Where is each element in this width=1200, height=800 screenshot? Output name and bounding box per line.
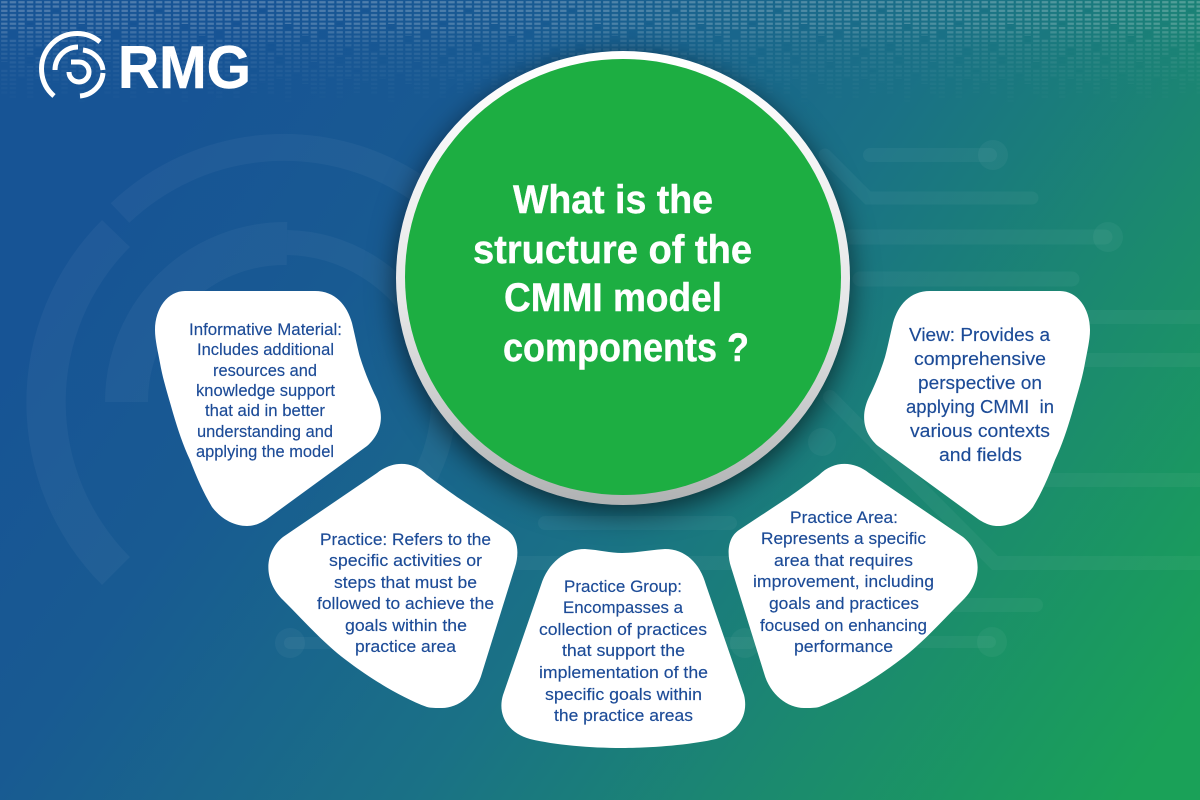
text: knowledge support: [196, 381, 335, 400]
logo wordmark: RMG: [118, 34, 251, 101]
logo: RMG: [42, 34, 251, 101]
blob shape: [155, 291, 381, 526]
text: applying the model: [196, 442, 334, 461]
panel: View: [864, 291, 1090, 526]
text: goals within the: [345, 616, 467, 635]
text: Practice Area:: [790, 508, 898, 527]
text: practice area: [355, 637, 457, 656]
text: followed to achieve the: [317, 594, 494, 613]
blob shape: [729, 464, 978, 708]
text: specific activities or: [329, 551, 482, 570]
text: Informative Material:: [189, 320, 342, 339]
text: Practice Group:: [564, 577, 682, 596]
title: CMMI model: [504, 276, 722, 320]
central circle: [396, 51, 850, 505]
text: applying CMMI in: [906, 396, 1054, 417]
blob shape: [268, 464, 517, 708]
text: [753, 508, 934, 656]
blob shape: [501, 549, 745, 748]
text: specific goals within: [545, 685, 702, 704]
title: [473, 178, 752, 370]
text: steps that must be: [334, 573, 477, 592]
text: goals and practices: [769, 594, 919, 613]
panel: Practice Group: [501, 549, 745, 748]
text: that aid in better: [205, 401, 325, 420]
text: comprehensive: [914, 348, 1046, 369]
text: area that requires: [774, 551, 913, 570]
circle ring with shadow: [396, 51, 850, 505]
text: resources and: [213, 361, 317, 380]
text: perspective on: [918, 372, 1042, 393]
title: components ?: [503, 326, 749, 370]
text: [317, 530, 494, 656]
text: Encompasses a: [563, 598, 684, 617]
green disc: [405, 59, 841, 495]
text: View: Provides a: [909, 324, 1051, 345]
text: [539, 577, 708, 725]
text: Includes additional: [197, 340, 334, 359]
icon: logo rings: [42, 34, 103, 96]
text: Practice: Refers to the: [320, 530, 491, 549]
text: collection of practices: [539, 620, 707, 639]
panel: Practice: [268, 464, 517, 708]
text: Represents a specific: [761, 529, 926, 548]
text: performance: [794, 637, 893, 656]
text: focused on enhancing: [760, 616, 927, 635]
text: understanding and: [197, 422, 333, 441]
text: improvement, including: [753, 572, 934, 591]
text: [906, 324, 1054, 465]
text: various contexts: [910, 420, 1050, 441]
title: What is the: [513, 178, 713, 222]
text: [189, 320, 342, 461]
text: that support the: [562, 641, 685, 660]
panel: Informative Material: [155, 291, 381, 526]
title: structure of the: [473, 228, 752, 272]
text: implementation of the: [539, 663, 708, 682]
text: the practice areas: [554, 706, 693, 725]
panel: Practice Area: [729, 464, 978, 708]
text: and fields: [939, 444, 1022, 465]
blob shape: [864, 291, 1090, 526]
